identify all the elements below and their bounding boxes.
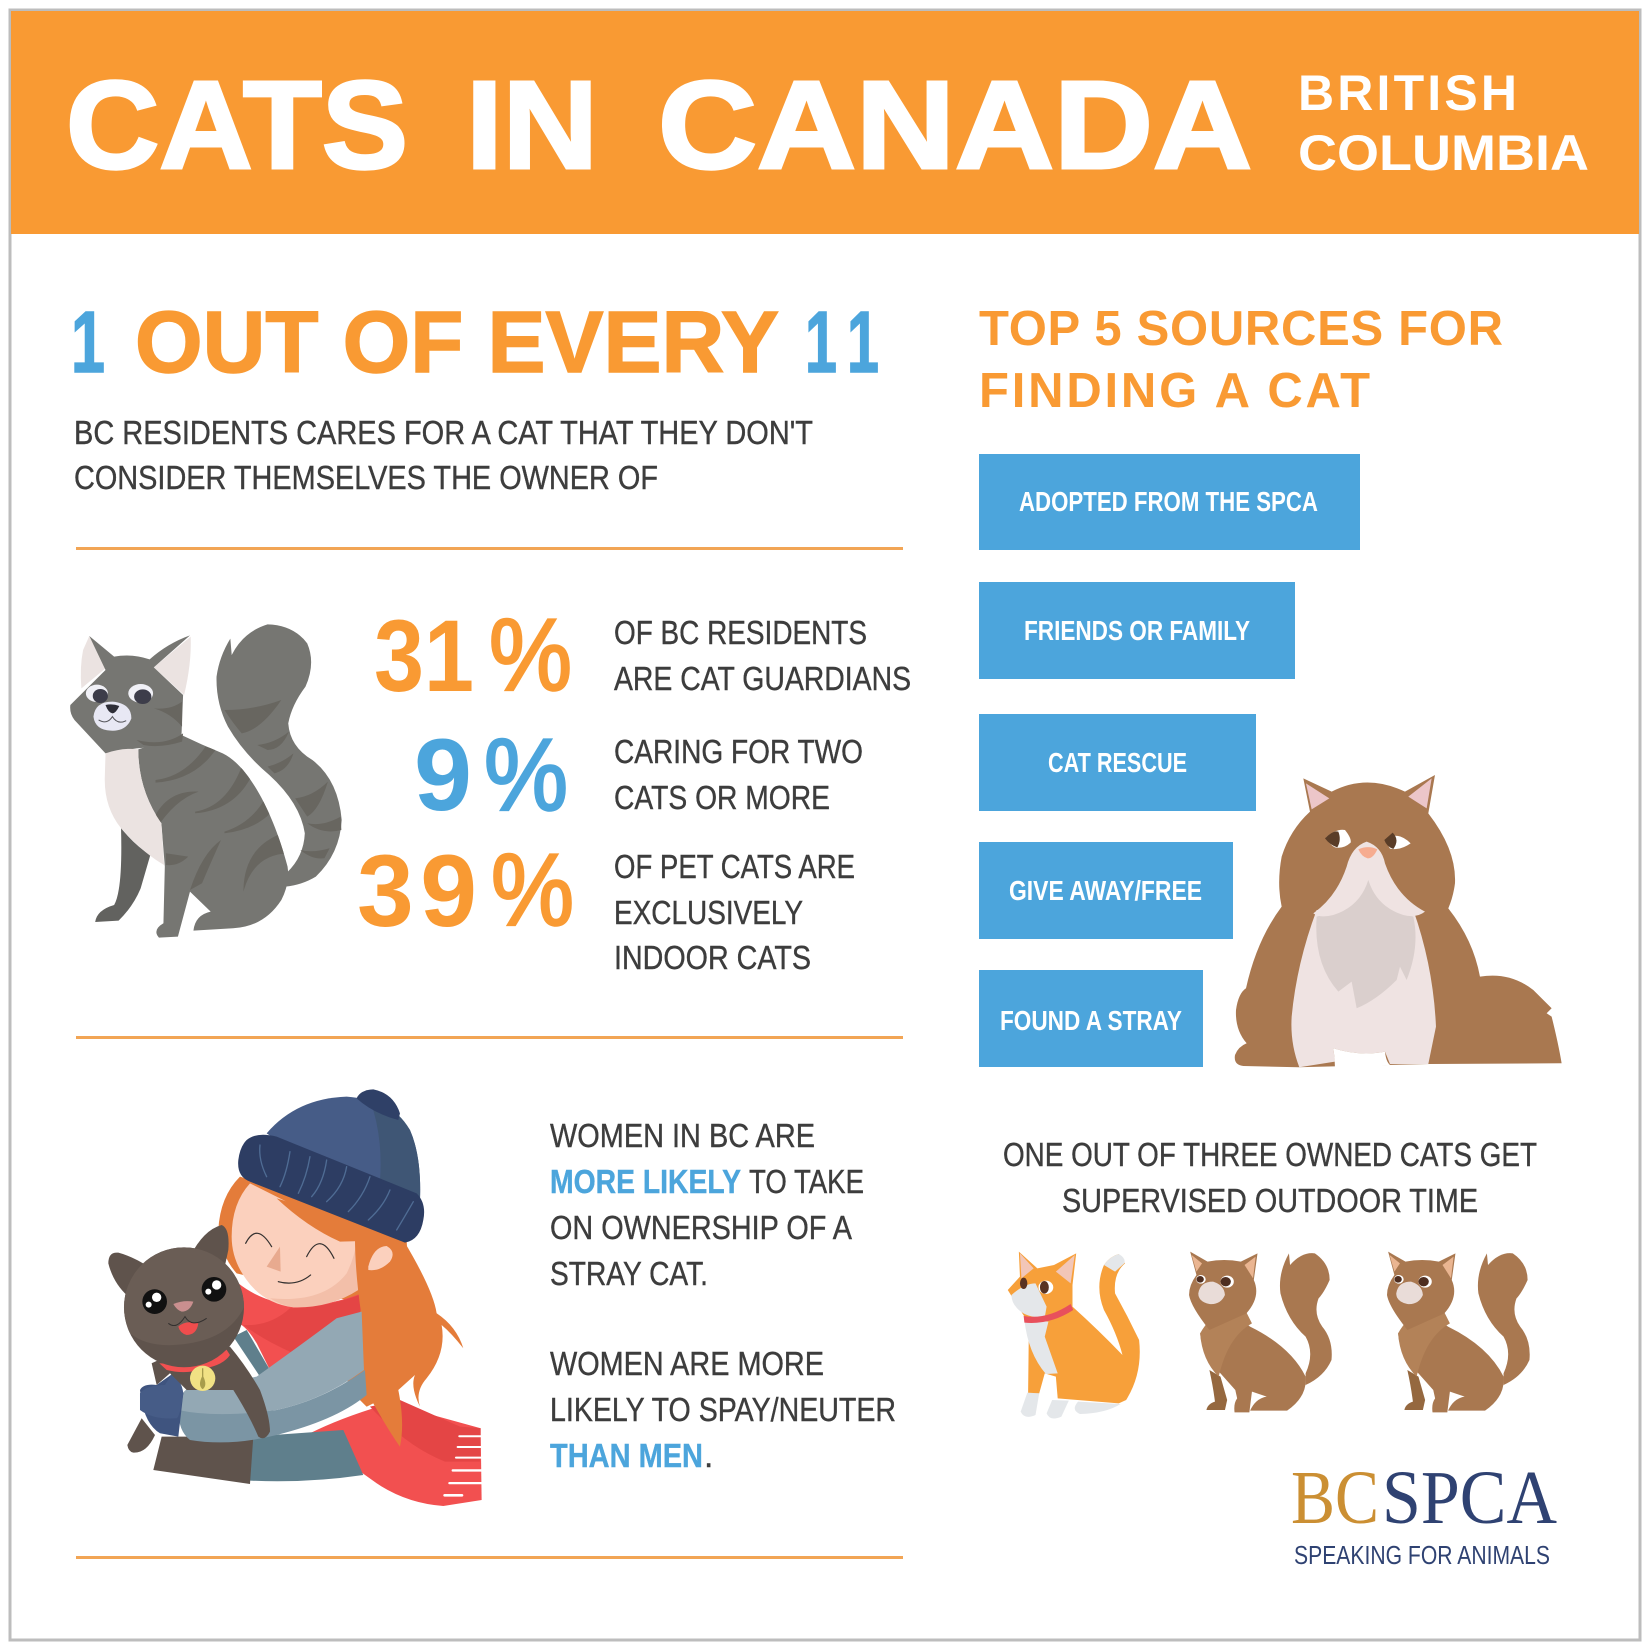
text: women more likely to take ownership: TO TAKE [749, 1164, 864, 1201]
bar: cat rescue [979, 714, 1256, 811]
title [66, 56, 1252, 195]
stat: 39%: % [491, 833, 574, 947]
stat: 9% [414, 718, 568, 832]
illustration: girl hugging a cat [108, 1089, 483, 1506]
stat: 31%: 31 [374, 599, 474, 713]
stat text: cat guardians [614, 615, 911, 698]
stat text: cat guardians: ARE CAT GUARDIANS [614, 661, 911, 698]
subtitle: BRITISH [1298, 65, 1517, 121]
title: CANADA [658, 56, 1252, 195]
text: women more likely to take ownership [550, 1118, 864, 1293]
heading: 1 out of every 11: 1 [805, 294, 837, 391]
text: women more likely to take ownership: MORE LIKELY [550, 1164, 741, 1201]
stat text: indoor cats: OF PET CATS ARE [614, 849, 855, 886]
stat text: two cats or more: CARING FOR TWO [614, 734, 863, 771]
title: IN [466, 56, 598, 195]
heading: top 5 sources: TOP 5 SOURCES FOR [979, 302, 1503, 356]
title: CATS [66, 56, 408, 195]
heading: top 5 sources [979, 302, 1503, 418]
intro text: CONSIDER THEMSELVES THE OWNER OF [74, 460, 658, 497]
bar: give away/free: GIVE AWAY/FREE [1009, 875, 1202, 906]
stat text: two cats or more: CATS OR MORE [614, 780, 830, 817]
bar: cat rescue: CAT RESCUE [1048, 747, 1187, 778]
intro text: BC RESIDENTS CARES FOR A CAT THAT THEY DON'T [74, 415, 813, 452]
stat text: two cats or more [614, 734, 863, 817]
text: women more likely to spay/neuter [550, 1346, 896, 1475]
header banner [11, 11, 1639, 234]
heading: top 5 sources: FINDING A CAT [979, 364, 1370, 418]
intro text [74, 415, 813, 497]
bar: found a stray: FOUND A STRAY [1000, 1005, 1182, 1036]
stat: 9%: 9 [414, 718, 472, 832]
bar: adopted from the SPCA: ADOPTED FROM THE SPCA [1019, 486, 1318, 517]
subtitle [1298, 65, 1589, 181]
text: women more likely to take ownership: WOMEN IN BC ARE [550, 1118, 815, 1155]
text: women more likely to take ownership: ON OWNERSHIP OF A [550, 1210, 853, 1247]
stat: 31%: % [489, 598, 572, 712]
bar: found a stray [979, 970, 1203, 1067]
bar: adopted from the SPCA [979, 454, 1360, 550]
stat text: indoor cats: EXCLUSIVELY [614, 895, 803, 932]
stat text: cat guardians: OF BC RESIDENTS [614, 615, 867, 652]
illustration: fluffy brown cat [1235, 775, 1562, 1068]
logo: BC SPCA [1291, 1456, 1557, 1570]
text: women more likely to spay/neuter: WOMEN ARE MORE [550, 1346, 824, 1383]
supervised outdoor text: ONE OUT OF THREE OWNED CATS GET [1003, 1137, 1537, 1174]
bar: friends or family: FRIENDS OR FAMILY [1024, 615, 1250, 646]
logo: BC SPCA: BC [1291, 1456, 1379, 1540]
heading: 1 out of every 11: 1 [71, 294, 105, 391]
illustration: brown cat two [1387, 1252, 1530, 1412]
supervised outdoor text: SUPERVISED OUTDOOR TIME [1062, 1183, 1478, 1220]
illustration: grey tabby cat [70, 624, 342, 938]
supervised outdoor text [1003, 1137, 1537, 1220]
heading: 1 out of every 11: 1 [847, 294, 879, 391]
logo: BC SPCA: SPCA [1382, 1456, 1557, 1540]
illustration: orange cat [1008, 1252, 1140, 1419]
stat: 9%: % [484, 718, 568, 832]
stat: 39%: 39 [357, 834, 477, 948]
text: women more likely to spay/neuter: . [704, 1438, 713, 1475]
bar: friends or family [979, 582, 1295, 679]
subtitle: COLUMBIA [1298, 125, 1589, 181]
text: women more likely to spay/neuter: LIKELY TO SPAY/NEUTER [550, 1392, 896, 1429]
logo: BC SPCA: SPEAKING FOR ANIMALS [1294, 1540, 1550, 1570]
stat text: indoor cats [614, 849, 855, 977]
illustration: brown cat one [1189, 1252, 1332, 1412]
stat: 31% [374, 598, 572, 713]
bar: give away/free [979, 842, 1233, 939]
stat: 39% [357, 833, 574, 948]
text: women more likely to spay/neuter: THAN MEN [550, 1438, 703, 1475]
text: women more likely to take ownership: STRAY CAT. [550, 1256, 708, 1293]
stat text: indoor cats: INDOOR CATS [614, 940, 811, 977]
heading: 1 out of every 11: OUT OF EVERY [135, 294, 779, 391]
